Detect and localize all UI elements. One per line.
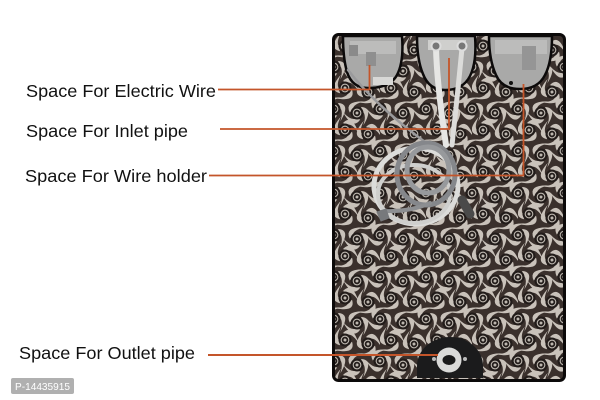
icon: inlet pipes bbox=[432, 42, 466, 145]
panel: middle pocket bbox=[417, 36, 475, 90]
arrow: inlet pipe leader bbox=[220, 58, 449, 129]
label: electric wire: Space For Electric Wire bbox=[26, 81, 216, 101]
arrow: wire holder leader bbox=[209, 84, 524, 176]
panel: left pocket bbox=[343, 36, 402, 88]
panel: patterned cover bbox=[334, 34, 564, 380]
icon: outlet fitting bbox=[417, 337, 483, 378]
label: outlet pipe: Space For Outlet pipe bbox=[19, 343, 195, 363]
label: inlet pipe: Space For Inlet pipe bbox=[26, 121, 188, 141]
icon: coiled hoses and wire bbox=[348, 70, 470, 224]
label: wire holder: Space For Wire holder bbox=[25, 166, 207, 186]
panel: right pocket bbox=[489, 36, 552, 89]
watermark: product id: P-14435915 bbox=[15, 381, 70, 393]
arrow: outlet pipe leader bbox=[208, 354, 438, 356]
watermark: product id bbox=[11, 378, 74, 394]
arrow: electric wire leader bbox=[218, 65, 370, 90]
